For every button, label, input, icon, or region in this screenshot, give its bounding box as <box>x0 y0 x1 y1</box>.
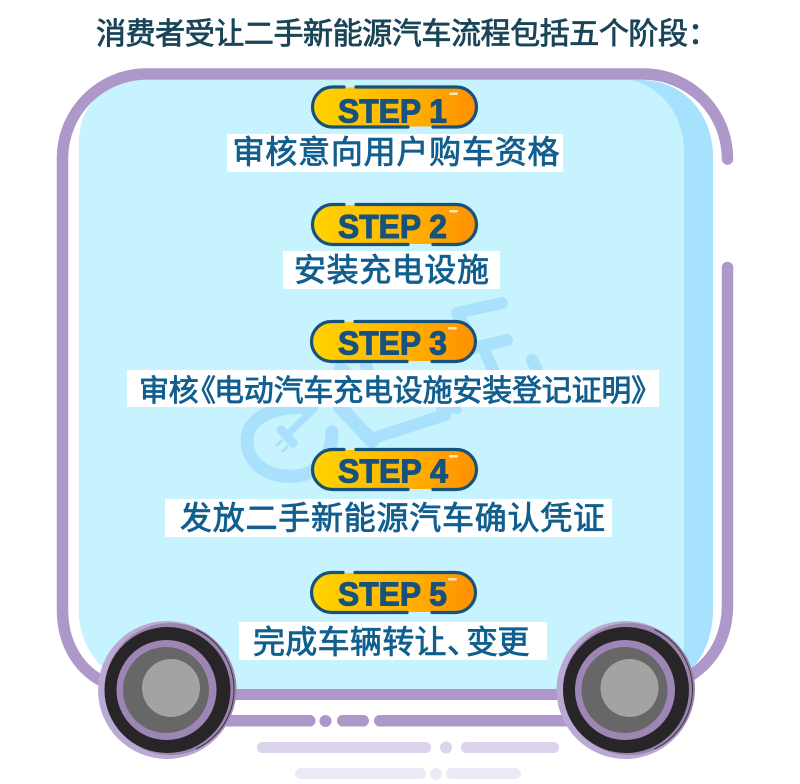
title: 消费者受让二手新能源汽车流程包括五个阶段 <box>96 18 688 51</box>
road lines <box>220 715 574 780</box>
badge <box>312 572 476 612</box>
step 4: 发放二手新能源汽车确认凭证 <box>180 500 605 536</box>
step 5: 变更 <box>466 624 529 660</box>
badge <box>312 204 476 244</box>
panel: vehicle body <box>62 74 728 700</box>
label <box>283 251 500 289</box>
badge <box>312 87 476 127</box>
body light fill <box>79 80 684 689</box>
step 1: 审核意向用户购车资格 <box>232 134 560 170</box>
step 2 <box>283 204 500 289</box>
label <box>227 134 563 172</box>
badge text: STEP 2 <box>338 208 447 245</box>
step 5 <box>239 572 547 660</box>
step 1 <box>227 87 563 172</box>
step 3: 《 <box>186 375 216 408</box>
watermark: electric car <box>247 303 537 476</box>
step 3: 》 <box>631 375 661 408</box>
outer outline <box>62 74 728 684</box>
right wheel <box>556 621 695 759</box>
step 2: 安装充电设施 <box>294 252 489 288</box>
step 4 <box>165 450 612 537</box>
label <box>165 499 612 537</box>
outline bottom edge <box>150 689 600 700</box>
step 5: 、 <box>447 624 479 660</box>
badge text: STEP 1 <box>338 92 447 130</box>
badge <box>312 322 476 362</box>
label <box>239 622 547 660</box>
badge <box>312 450 476 490</box>
title: ： <box>688 18 718 51</box>
badge text: STEP 4 <box>338 452 449 490</box>
body fill <box>79 80 713 689</box>
badge text: STEP 5 <box>338 576 447 612</box>
label <box>127 370 659 407</box>
step 3: 电动汽车充电设施安装登记证明 <box>214 375 631 408</box>
step 3 <box>127 322 661 408</box>
badge text: STEP 3 <box>338 324 447 362</box>
step 5: 完成车辆转让 <box>253 624 447 660</box>
left wheel <box>98 621 236 759</box>
step 3: 审核 <box>139 375 198 408</box>
